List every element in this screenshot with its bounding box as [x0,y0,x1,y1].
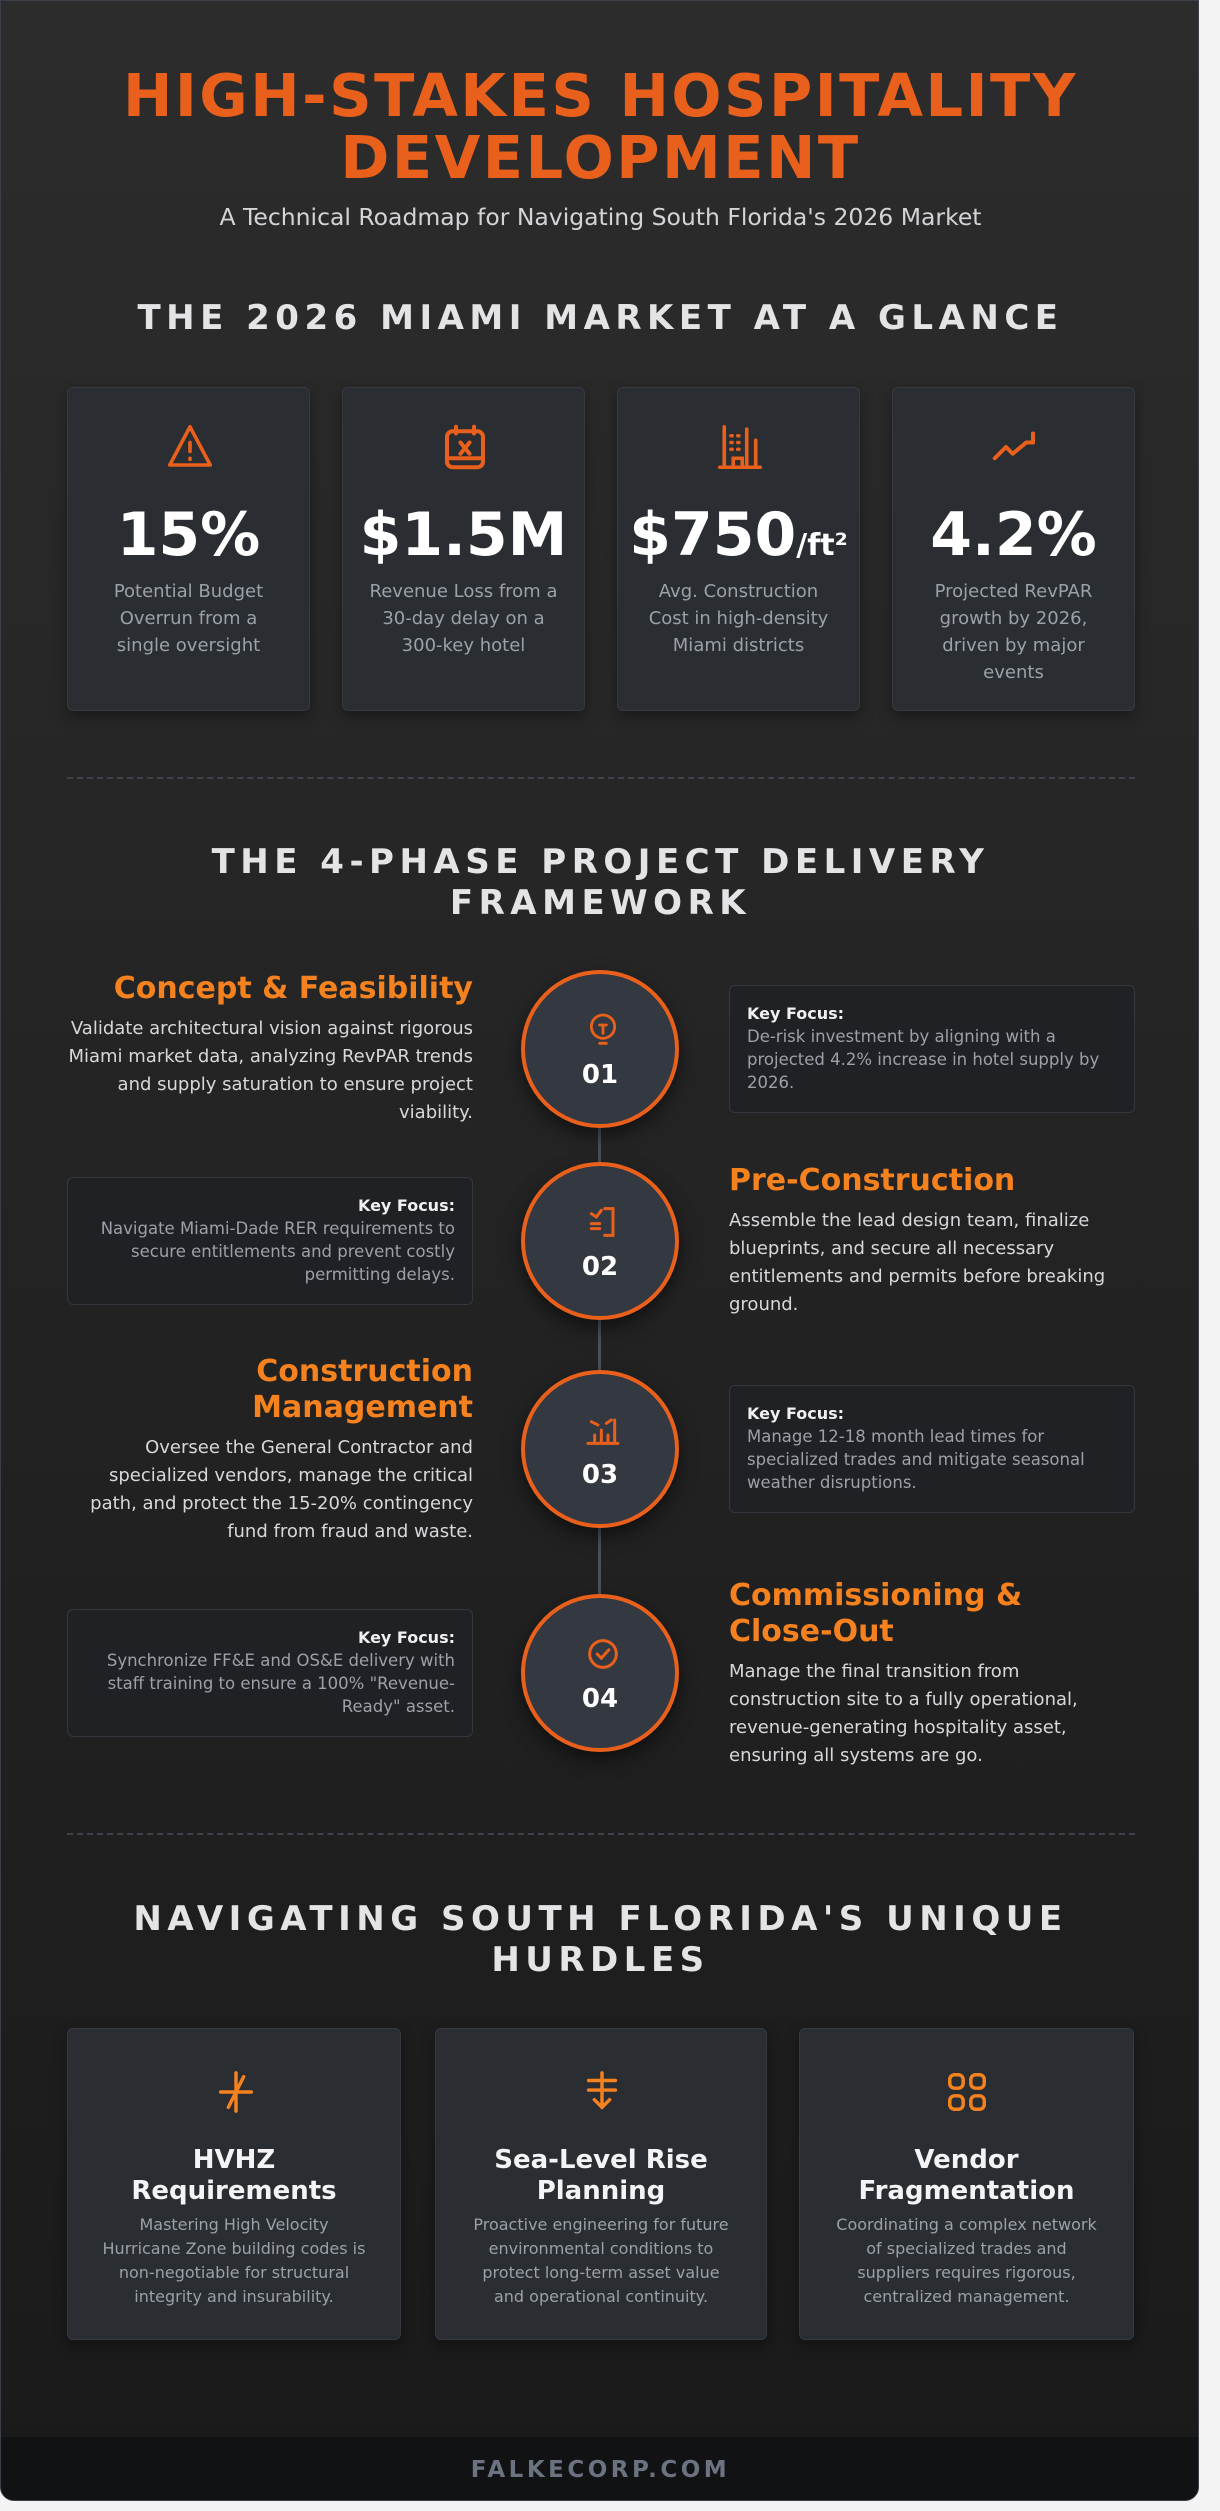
hurdle card: sea-level [435,2028,767,2340]
hurdle description: Proactive engineering for future environmental conditions to protect long-term asset value and operational continuity. [473,2215,729,2306]
icon: crane chart [586,1418,620,1445]
phase 2 key focus: Navigate Miami-Dade RER requirements to secure entitlements and prevent costly permitting delays. [101,1219,455,1284]
hurdle card: vendor [799,2028,1134,2340]
phase 1 circle: 01 [582,1060,618,1090]
phase 4 key focus: Synchronize FF&E and OS&E delivery with staff training to ensure a 100% "Revenue-Ready" asset. [107,1651,455,1716]
footer [1,2437,1200,2503]
phase 2 key focus: Key Focus: [358,1196,455,1215]
stat description: Avg. Construction Cost in high-density Miami districts [649,581,828,656]
phase 1 key focus [729,985,1135,1113]
stat value: $1.5M [360,500,567,570]
phase 4 text: Manage the final transition from construction site to a fully operational, revenue-generating hospitality asset, ensuring all systems are go. [729,1661,1078,1766]
hurdle title [494,2145,708,2206]
hurdle card: HVHZ [67,2028,401,2340]
phase 1 key focus: Key Focus: [747,1004,844,1023]
hurdle title: HVHZ [193,2145,275,2175]
phase 2 text [729,1163,1105,1315]
phase 3 text: Management [252,1390,473,1425]
stat card: $750 [617,387,860,711]
icon: calendar x [444,424,486,470]
icon: water level [586,2071,618,2110]
heading: market at a glance: THE 2026 MIAMI MARKET AT A GLANCE [137,298,1064,338]
stat card: 15% [67,387,310,711]
phase 1 text: Validate architectural vision against rigorous Miami market data, analyzing RevPAR trends and supply saturation to ensure project viability. [68,1018,473,1123]
footer: FALKECORP.COM [471,2457,730,2483]
phase 2 circle: 02 [582,1252,618,1282]
hurdle title: Vendor [914,2145,1019,2175]
phase 3 text: Oversee the General Contractor and specialized vendors, manage the critical path, and protect the 15-20% contingency fund from fraud and waste. [90,1437,473,1542]
title: HIGH-STAKES HOSPITALITY [123,61,1078,130]
icon: wind [218,2071,253,2113]
stat description: Potential Budget Overrun from a single oversight [114,581,263,656]
hurdle description: Coordinating a complex network of specialized trades and suppliers requires rigorous, centralized management. [836,2215,1097,2306]
stat description: Projected RevPAR growth by 2026, driven by major events [935,581,1092,683]
heading: 4-phase framework [212,842,989,923]
phase 4 text [729,1578,1078,1766]
icon: permit [590,1207,614,1237]
hurdle title [131,2145,337,2206]
heading: hurdles: HURDLES [491,1940,710,1980]
phase 4 circle [521,1594,679,1752]
phase 3 circle: 03 [582,1460,618,1490]
icon: bulb [590,1014,616,1045]
phase 1 text: Concept & Feasibility [114,971,473,1006]
hurdle title [858,2145,1074,2206]
hurdle title: Fragmentation [858,2176,1074,2206]
phase 4 key focus [67,1609,473,1737]
phase 1 key focus: De-risk investment by aligning with a projected 4.2% increase in hotel supply by 2026. [747,1027,1099,1092]
phase 2 circle [521,1162,679,1320]
icon: grid [948,2073,986,2111]
heading: hurdles [133,1899,1068,1980]
icon: check circle [588,1639,618,1669]
icon: warning [168,424,212,467]
stat description: Revenue Loss from a 30-day delay on a 300-key hotel [370,581,557,656]
phase 1 circle [521,970,679,1128]
stat value: 4.2% [930,500,1097,570]
title: DEVELOPMENT [340,123,861,192]
icon: building [718,425,762,469]
stat value: $750/ft² [629,500,848,570]
phase 4 key focus: Key Focus: [358,1628,455,1647]
heading: 4-phase framework: THE 4-PHASE PROJECT DELIVERY [212,842,989,882]
phase 4 circle: 04 [582,1684,618,1714]
phase 2 text: Pre-Construction [729,1163,1015,1198]
hurdle title: Requirements [131,2176,337,2206]
title [123,61,1078,192]
hurdle title: Sea-Level Rise [494,2145,708,2175]
phase 3 key focus: Key Focus: [747,1404,844,1423]
phase 3 circle [521,1370,679,1528]
phase 4 text: Close-Out [729,1614,894,1649]
phase 3 text [90,1354,473,1542]
phase 3 text: Construction [256,1354,473,1389]
phase 2 key focus [67,1177,473,1305]
phase 3 key focus [729,1385,1135,1513]
stat card: $1.5M [342,387,585,711]
icon: trend up [992,432,1036,460]
phase 1 text [68,971,473,1123]
heading: 4-phase framework: FRAMEWORK [450,883,751,923]
heading: hurdles: NAVIGATING SOUTH FLORIDA'S UNIQUE [133,1899,1068,1939]
hurdle description: Mastering High Velocity Hurricane Zone building codes is non-negotiable for structural integrity and insurability. [103,2215,365,2306]
phase 4 text: Commissioning & [729,1578,1022,1613]
subtitle: A Technical Roadmap for Navigating South Florida's 2026 Market [219,203,982,231]
stat value: 15% [117,500,260,570]
timeline line [598,1051,601,1671]
phase 3 key focus: Manage 12-18 month lead times for specialized trades and mitigate seasonal weather disruptions. [747,1427,1085,1492]
hurdle title: Planning [537,2176,665,2206]
phase 2 text: Assemble the lead design team, finalize blueprints, and secure all necessary entitlements and permits before breaking ground. [729,1210,1105,1315]
stat card: 4.2% [892,387,1135,711]
